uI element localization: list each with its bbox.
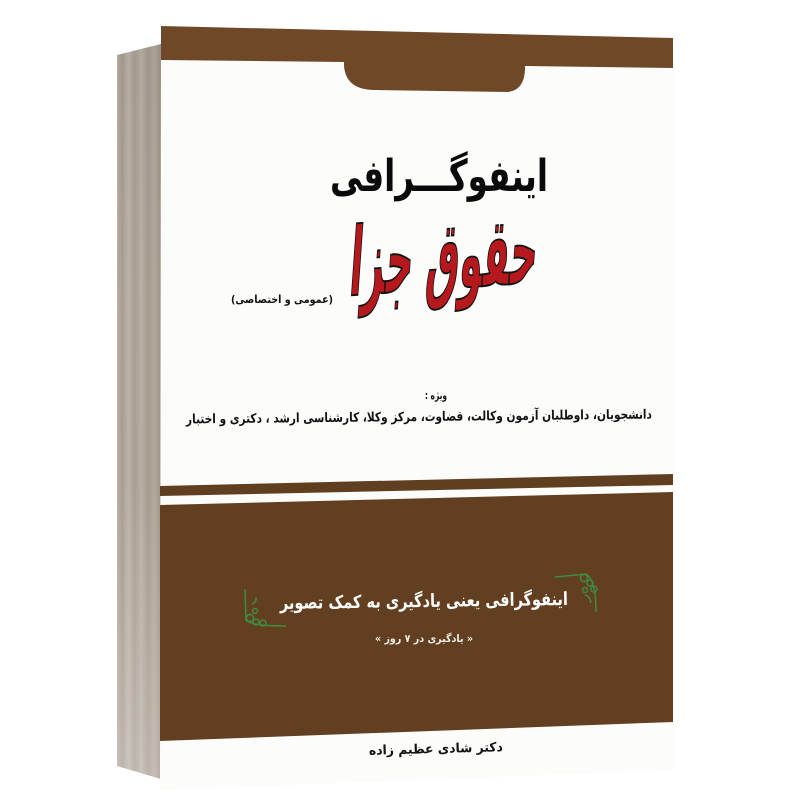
slogan note: learning in 7 days: « یادگیری در ۷ روز » xyxy=(375,632,473,645)
top brown band with tab xyxy=(161,26,673,92)
subtitle: general and specific: (عمومی و اختصاصی) xyxy=(231,293,333,306)
title: criminal law: حقوق جزا xyxy=(347,196,542,319)
book cover xyxy=(160,26,673,790)
ornament: bottom left xyxy=(245,589,286,626)
slogan: اینفوگرافی یعنی یادگیری به کمک تصویر xyxy=(279,588,568,614)
thin divider band xyxy=(160,474,673,496)
audience label: ویژه : xyxy=(425,389,447,402)
book spine page edges xyxy=(117,44,161,779)
lower brown panel xyxy=(160,492,673,741)
author name: دکتر شادی عظیم زاده xyxy=(369,740,503,759)
title: infographic: اینفوگـــرافی xyxy=(330,150,548,202)
ornament: top right xyxy=(555,574,597,612)
audience list: دانشجویان، داوطلبان آزمون وکالت، قضاوت، مرکز وکلا، کارشناسی ارشد ، دکتری و اختبار xyxy=(185,406,652,427)
white cover background xyxy=(160,26,673,790)
